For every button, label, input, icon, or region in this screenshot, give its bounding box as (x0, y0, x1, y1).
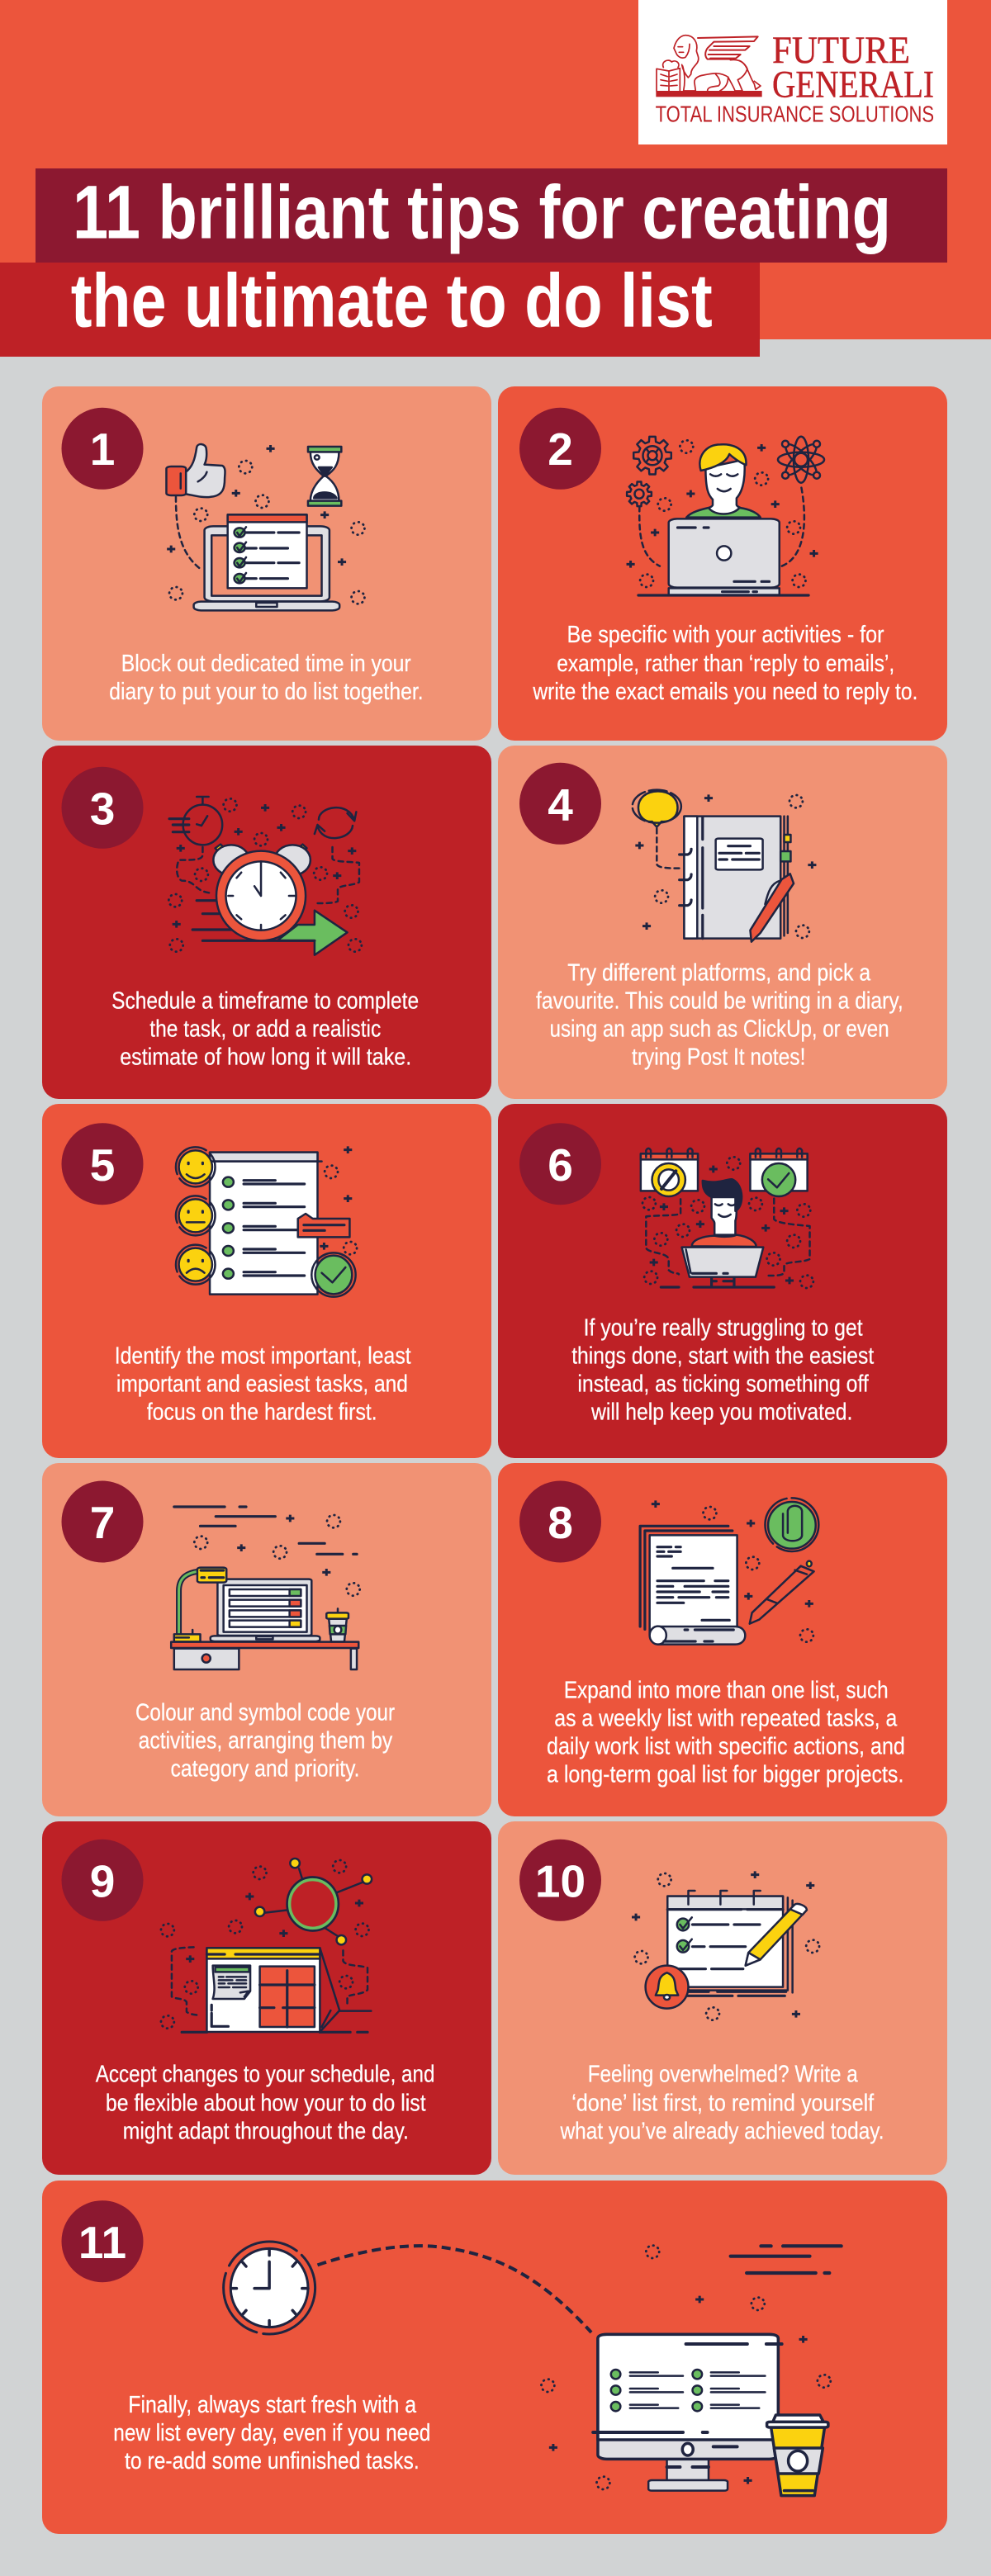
logo lion emblem (656, 36, 762, 97)
tip 10 text (560, 2062, 884, 2144)
tip 9 text: be flexible about how your to do list (106, 2090, 426, 2116)
tip 3 text: estimate of how long it will take. (120, 1044, 411, 1071)
icon: clock connected to desktop monitor and coffee cup (224, 2242, 842, 2496)
tip 11 text: to re-add some unfinished tasks. (125, 2448, 420, 2474)
panel: tip 2 (498, 386, 947, 741)
tip 10 text: ‘done’ list first, to remind yourself (571, 2090, 875, 2116)
tip 7 text: Colour and symbol code your (135, 1699, 395, 1726)
tip 11 text: new list every day, even if you need (113, 2420, 430, 2446)
panel: tip 7 (42, 1463, 491, 1816)
title (0, 168, 947, 357)
tip 8 text (547, 1678, 905, 1788)
tip 10 text: Feeling overwhelmed? Write a (588, 2062, 858, 2088)
panel: tip 6 (498, 1104, 947, 1458)
title: the ultimate to do list (71, 259, 713, 343)
tip 7 text: activities, arranging them by (139, 1727, 393, 1754)
panel: tip 11 (42, 2181, 947, 2534)
icon: paper scroll with paperclip and pen (640, 1498, 818, 1645)
number 11: 11 (78, 2217, 126, 2268)
tip 4 text: favourite. This could be writing in a diary, (536, 988, 903, 1015)
tip 11 text: Finally, always start fresh with a (128, 2392, 417, 2418)
tip 6 text (571, 1315, 874, 1426)
icon: list with smileys and check badge (176, 1146, 357, 1297)
logo wordmark: FUTURE (772, 29, 910, 72)
tip 8 text: as a weekly list with repeated tasks, a (554, 1706, 898, 1732)
panel: tip 1 (42, 386, 491, 741)
tip 1 text: diary to put your to do list together. (109, 679, 424, 705)
logo: Future Generali (638, 0, 947, 144)
number 9: 9 (90, 1856, 115, 1907)
tip 9 text: Accept changes to your schedule, and (96, 2062, 434, 2088)
number 2: 2 (548, 424, 573, 475)
icon: notebook with pen and speech bubble (633, 790, 816, 942)
panel: tip 4 (498, 746, 947, 1099)
number 3: 3 (90, 783, 115, 834)
panel: tip 5 (42, 1104, 491, 1458)
tip 5 text: Identify the most important, least (115, 1343, 411, 1370)
tip 4 text: using an app such as ClickUp, or even (550, 1016, 889, 1043)
tip 8 text: a long-term goal list for bigger projects. (547, 1762, 903, 1788)
tip 4 text (536, 960, 903, 1071)
number 5: 5 (90, 1139, 115, 1191)
tip 7 text (135, 1699, 395, 1782)
tip 8 text: Expand into more than one list, such (564, 1678, 889, 1704)
tip 5 text: focus on the hardest first. (147, 1399, 377, 1426)
tip 8 text: daily work list with specific actions, and (547, 1734, 905, 1760)
tip 1 text: Block out dedicated time in your (121, 651, 411, 677)
icon: desk with laptop, lamp and coffee (171, 1507, 360, 1669)
panel: tip 8 (498, 1463, 947, 1816)
icon: wall calendar and connected ring (161, 1859, 372, 2032)
tip 7 text: category and priority. (170, 1755, 360, 1782)
icon: notepad with pencil and bell (632, 1871, 819, 2020)
tip 6 text: things done, start with the easiest (571, 1343, 874, 1370)
number 10: 10 (535, 1856, 586, 1907)
number 7: 7 (90, 1497, 115, 1548)
tip 4 text: trying Post It notes! (632, 1044, 805, 1071)
icon: person at laptop with gears and atom (627, 437, 824, 595)
tip 5 text (115, 1343, 411, 1426)
tip 10 text: what you’ve already achieved today. (560, 2118, 884, 2144)
tip 3 text: Schedule a timeframe to complete (111, 988, 419, 1015)
panel: tip 9 (42, 1821, 491, 2175)
tip 2 text: example, rather than ‘reply to emails’, (557, 651, 894, 677)
logo wordmark (656, 29, 934, 127)
header band (0, 0, 991, 339)
tip 6 text: instead, as ticking something off (577, 1371, 870, 1398)
tip 3 text (111, 988, 419, 1071)
tip 2 text: write the exact emails you need to reply to. (533, 679, 918, 705)
tip 1 text (109, 651, 424, 705)
number 8: 8 (548, 1497, 573, 1548)
tip 6 text: will help keep you motivated. (590, 1399, 852, 1426)
tip 2 text (533, 622, 918, 705)
number 4: 4 (548, 779, 573, 831)
tip 9 text (96, 2062, 434, 2144)
number 1: 1 (90, 424, 115, 475)
tip 2 text: Be specific with your activities - for (567, 622, 884, 648)
tip 3 text: the task, or add a realistic (149, 1016, 381, 1043)
tip 11 text (113, 2392, 430, 2474)
tip 5 text: important and easiest tasks, and (116, 1371, 408, 1398)
number 6: 6 (548, 1139, 573, 1191)
panel: tip 10 (498, 1821, 947, 2175)
icon: laptop with checklist, thumbs up and hourglass (166, 444, 364, 610)
icon: alarm clock with arrow and stopwatch (168, 797, 362, 955)
logo wordmark: GENERALI (772, 63, 934, 106)
tip 4 text: Try different platforms, and pick a (567, 960, 871, 987)
panel: tip 3 (42, 746, 491, 1099)
tip 6 text: If you’re really struggling to get (584, 1315, 863, 1342)
tip 9 text: might adapt throughout the day. (123, 2118, 409, 2144)
icon: person at laptop between two calendars (641, 1148, 813, 1288)
